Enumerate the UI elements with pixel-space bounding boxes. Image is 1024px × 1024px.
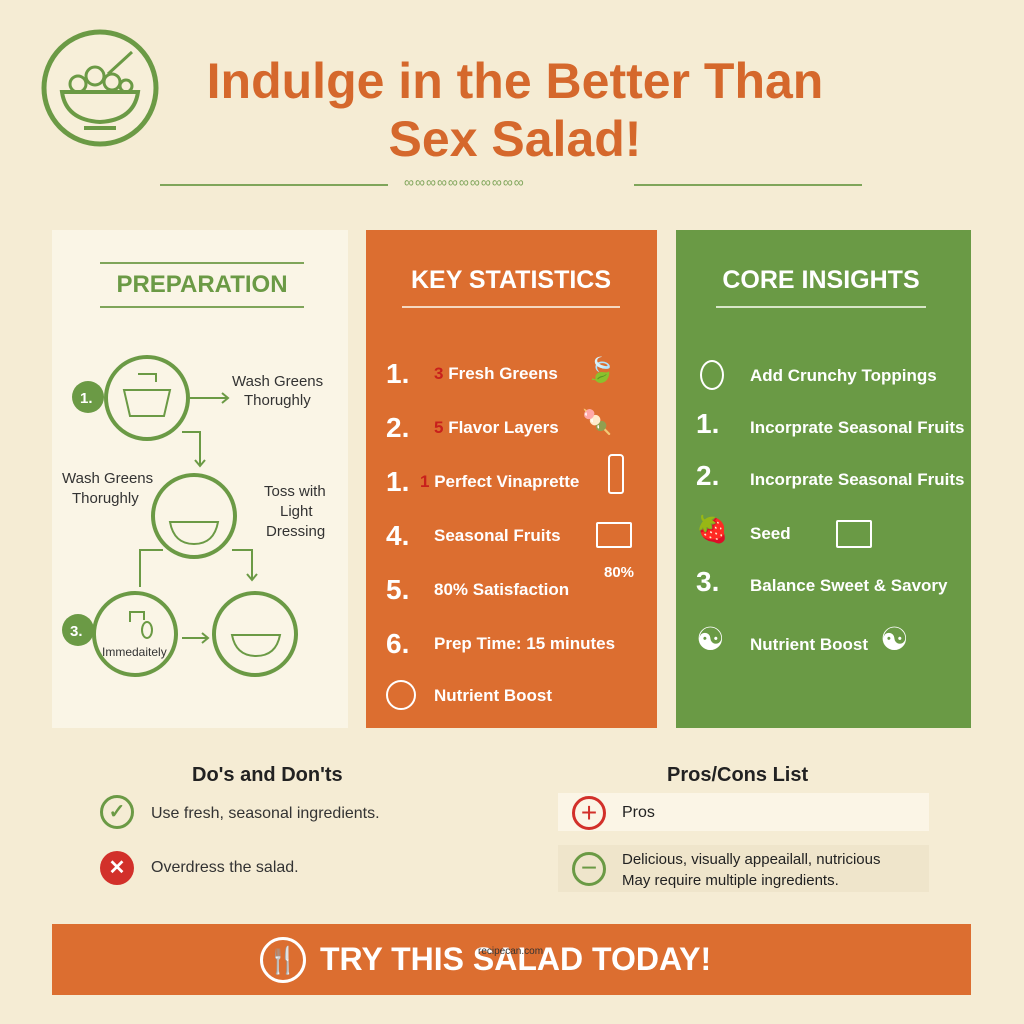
stats list: Seasonal Fruits — [434, 526, 561, 545]
insights list: 1. — [696, 408, 719, 439]
pros box — [558, 793, 929, 831]
stats list: 80% — [604, 564, 634, 581]
CTA banner: recipecan.com — [478, 946, 543, 957]
stats list: 1. — [386, 466, 409, 497]
text: Overdress the salad. — [151, 859, 299, 876]
stats list: Nutrient Boost — [434, 686, 552, 705]
icon: check — [100, 795, 134, 829]
stats list: 4. — [386, 520, 409, 551]
insights list: 🍓 — [696, 514, 728, 544]
heading: preparation — [100, 262, 304, 308]
CTA banner — [52, 924, 971, 995]
flow diagram — [62, 355, 326, 677]
title: Indulge in the Better Than — [207, 53, 823, 109]
stats list: Prep Time: 15 minutes — [434, 634, 615, 653]
CTA banner: TRY THIS SALAD TODAY! — [320, 941, 711, 977]
title: Sex Salad! — [389, 111, 641, 167]
stats list: 🍡 — [582, 409, 612, 436]
flow diagram: Thorughly — [244, 392, 311, 409]
insights list: 2. — [696, 460, 719, 491]
stats list: 3 Fresh Greens — [434, 364, 558, 383]
insights list: Nutrient Boost — [750, 635, 868, 654]
stats list: 1 Perfect Vinaprette — [420, 472, 579, 491]
cons box — [558, 845, 929, 892]
panel: preparation — [52, 230, 348, 728]
stats list: 1. — [386, 358, 409, 389]
flow diagram: Immedaitely — [102, 645, 167, 659]
insights list: Seed — [750, 524, 791, 543]
flow diagram: 3. — [70, 623, 83, 640]
icon: cross — [100, 851, 134, 885]
flow diagram: Thorughly — [72, 490, 139, 507]
panel: core insights — [676, 230, 971, 728]
stats list: 5 Flavor Layers — [434, 418, 559, 437]
icon: cross: ✕ — [109, 857, 125, 879]
text: Use fresh, seasonal ingredients. — [151, 805, 380, 822]
flow diagram: Wash Greens — [232, 373, 323, 390]
stats list: 6. — [386, 628, 409, 659]
flow diagram: Toss with — [264, 483, 326, 500]
insights list: Incorprate Seasonal Fruits — [750, 470, 964, 489]
heading: core insights — [716, 260, 926, 308]
flow diagram: Wash Greens — [62, 470, 153, 487]
heading: pros/cons: Pros/Cons List — [667, 764, 808, 786]
divider: ∞∞∞∞∞∞∞∞∞∞∞ — [404, 174, 525, 190]
stats list — [386, 356, 634, 710]
insights list: ☯ — [696, 621, 725, 657]
insights list: Incorprate Seasonal Fruits — [750, 418, 964, 437]
cons box: − — [581, 852, 597, 883]
insights list: 3. — [696, 566, 719, 597]
flow diagram: 1. — [80, 390, 93, 407]
heading: do's and don'ts: Do's and Don'ts — [192, 764, 343, 786]
insights list: Balance Sweet & Savory — [750, 576, 947, 595]
cons box: Delicious, visually appeailall, nutricious — [622, 851, 880, 868]
stats list: 5. — [386, 574, 409, 605]
pros box: Pros — [622, 804, 655, 821]
CTA banner: 🍴 — [267, 945, 299, 975]
stats list: 🍃 — [586, 357, 616, 384]
title — [207, 53, 823, 167]
heading: core insights: CORE INSIGHTS — [722, 266, 920, 294]
flow diagram: Dressing — [266, 523, 325, 540]
flow diagram: Light — [280, 503, 313, 520]
insights list: Add Crunchy Toppings — [750, 366, 937, 385]
panel: key statistics — [366, 230, 657, 728]
insights list — [696, 360, 964, 657]
heading: key statistics — [402, 260, 620, 308]
stats list: 2. — [386, 412, 409, 443]
icon: check: ✓ — [109, 801, 125, 823]
stats list: 80% Satisfaction — [434, 580, 569, 599]
logo: salad bowl — [42, 30, 158, 146]
heading: key statistics: KEY STATISTICS — [411, 266, 611, 294]
pros box: + — [581, 797, 597, 828]
cons box: May require multiple ingredients. — [622, 872, 839, 889]
insights list: ☯ — [880, 621, 909, 657]
heading: preparation: PREPARATION — [116, 271, 288, 298]
